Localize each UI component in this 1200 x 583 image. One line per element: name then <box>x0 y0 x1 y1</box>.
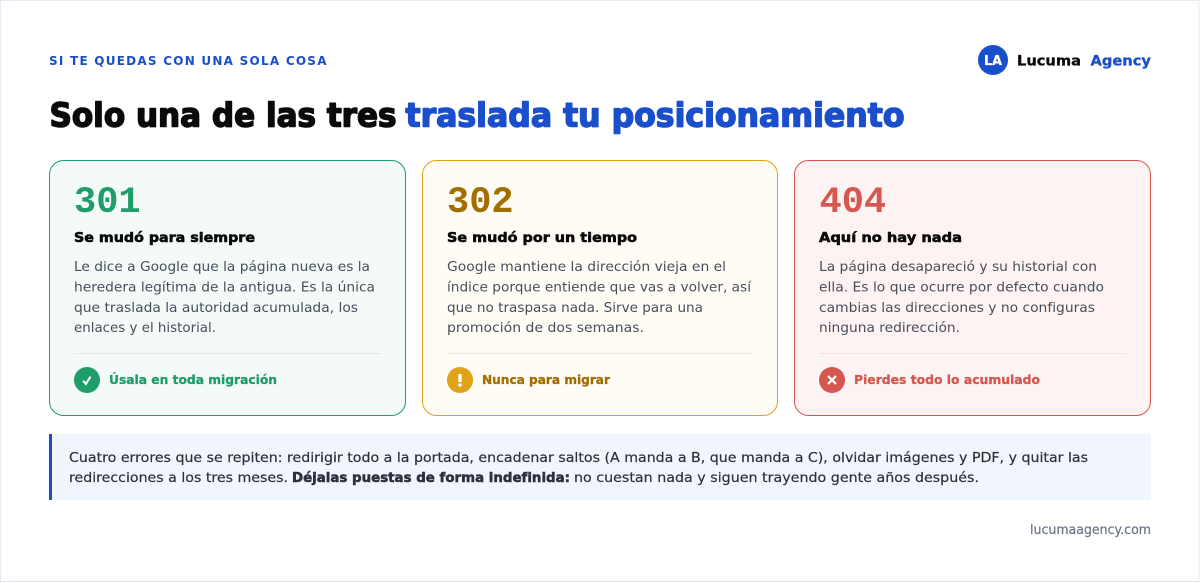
status code 404: 404 <box>820 182 886 224</box>
heading 301: Se mudó para siempre <box>74 230 255 246</box>
callout <box>49 434 1151 500</box>
brand logo: LA <box>984 54 1002 69</box>
description 302: índice porque entiende que vas a volver, así <box>447 280 752 296</box>
panel: 404 <box>794 160 1150 416</box>
heading 404: Aquí no hay nada <box>819 230 962 246</box>
title <box>50 96 904 134</box>
description 302: Google mantiene la dirección vieja en el <box>447 259 726 275</box>
verdict 301: Úsala en toda migración <box>109 372 277 387</box>
heading 302: Se mudó por un tiempo <box>447 230 637 246</box>
description 404: La página desapareció y su historial con <box>819 259 1097 275</box>
description 404 <box>819 259 1104 336</box>
description 301: heredera legítima de la antigua. Es la única <box>74 280 375 296</box>
description 301: Le dice a Google que la página nueva es la <box>74 259 370 275</box>
verdict 302: Nunca para migrar <box>482 373 610 387</box>
callout: Déjalas puestas de forma indefinida: <box>292 470 570 486</box>
description 404: ella. Es lo que ocurre por defecto cuando <box>819 280 1104 296</box>
description 301: enlaces y el historial. <box>74 320 216 336</box>
description 301: que traslada la autoridad acumulada, los <box>74 300 358 316</box>
brand logo <box>978 45 1151 75</box>
icon: warning <box>447 367 473 393</box>
description 302 <box>447 259 752 336</box>
description 301 <box>74 259 375 336</box>
description 404: ninguna redirección. <box>819 320 960 336</box>
description 302: promoción de dos semanas. <box>447 320 644 336</box>
description 302: que no traspasa nada. Sirve para una <box>447 300 703 316</box>
panel: 302 <box>422 160 778 416</box>
callout: redirecciones a los tres meses. <box>69 470 288 486</box>
title: traslada tu posicionamiento <box>406 96 904 134</box>
brand logo: Lucuma <box>1017 54 1081 70</box>
eyebrow label: SI TE QUEDAS CON UNA SOLA COSA <box>49 54 327 68</box>
description 404: cambias las direcciones y no configuras <box>819 300 1095 316</box>
callout: no cuestan nada y siguen trayendo gente años después. <box>574 470 979 486</box>
callout: Cuatro errores que se repiten: redirigir todo a la portada, encadenar saltos (A manda a B, que manda a C), olvidar imágenes y PDF, y quitar las <box>69 450 1088 466</box>
footer url: lucumaagency.com <box>1030 523 1151 538</box>
panel: 301 <box>50 160 406 416</box>
verdict 404: Pierdes todo lo acumulado <box>854 373 1040 387</box>
icon: check <box>74 367 100 393</box>
status code 302: 302 <box>447 182 514 224</box>
icon: cross <box>819 367 845 393</box>
brand logo: Agency <box>1090 54 1151 70</box>
title: Solo una de las tres <box>50 96 396 134</box>
status code 301: 301 <box>74 182 141 224</box>
